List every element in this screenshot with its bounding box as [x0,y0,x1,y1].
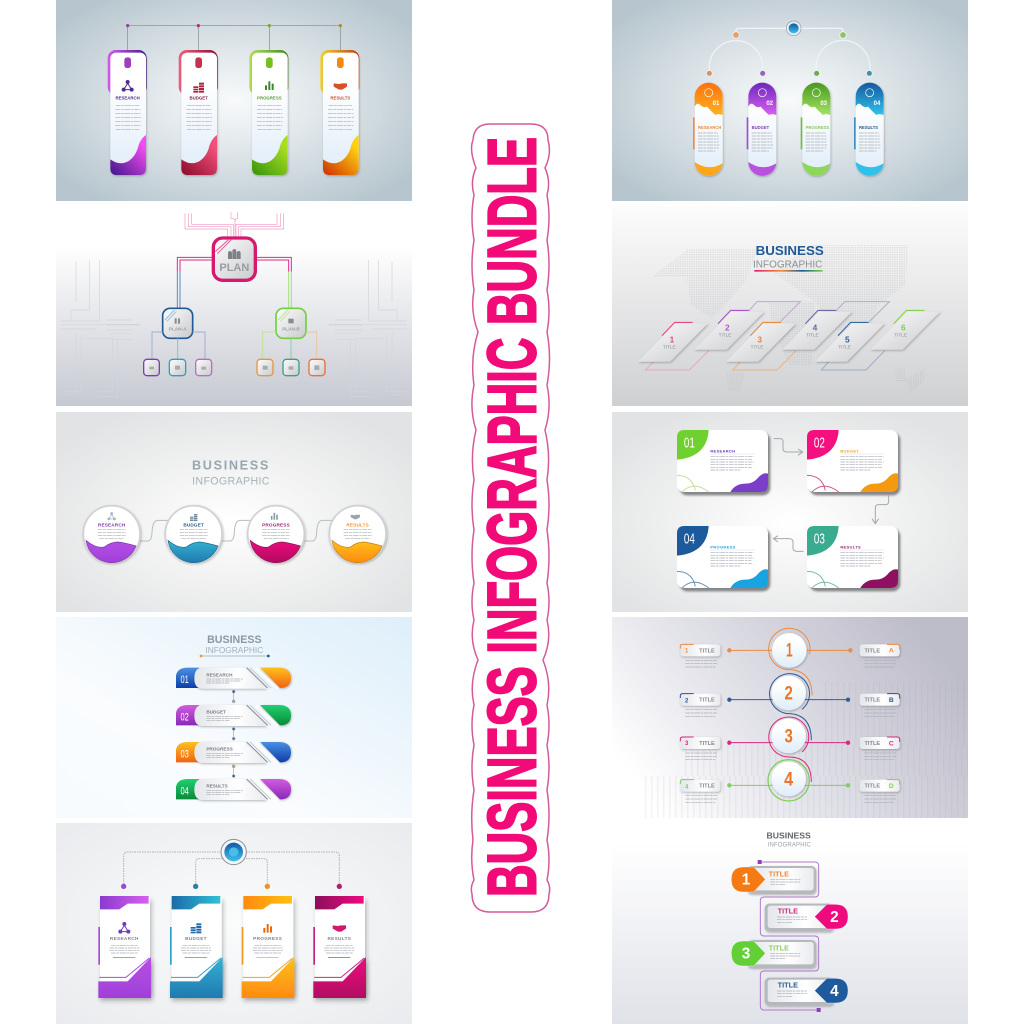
connectors to plan-A and plan-B [177,257,291,308]
circuit lines left [61,260,139,397]
row 03 progress: 03 [180,748,189,760]
tile 5: TITLE [838,345,851,350]
panel: circles with waves [56,412,412,612]
right item A: A [889,648,894,655]
capsule: budget: 02 [766,101,774,107]
card: results: RESULTS [330,95,350,100]
row 03 progress [176,742,291,763]
row 03 progress: PROGRESS [206,747,233,752]
left item 2: 2 [685,698,689,704]
left item 2 [680,694,720,716]
title: INFOGRAPHIC [192,475,270,487]
panel: stacked horizontal tabs [56,617,412,818]
panel background [56,617,412,818]
tile 2: 2 [725,322,730,332]
tile 4: 4 [813,322,818,332]
left item 4: 4 [685,784,689,790]
right item D: TITLE [864,784,880,790]
title: INFOGRAPHIC [768,842,812,848]
panel background [612,0,968,201]
arrow 02 to 03 [872,495,889,524]
row 01 research [176,668,291,689]
step 4: 4 [830,983,839,1000]
right item D [860,780,900,802]
sub boxes A [144,359,212,376]
card 02: 02 [814,436,825,452]
title [192,458,270,487]
capsule: results: RESULTS [859,125,878,130]
card: research [98,896,151,998]
step 2: 2 [830,909,839,926]
capsule: results: 04 [874,101,881,107]
capsule: research: RESEARCH [698,125,721,130]
purple wire [758,860,821,1012]
panel: numbered circle chain [612,617,968,818]
card 03: 03 [814,532,825,548]
left item 3 [680,737,720,760]
left item 1 [680,644,720,667]
panel: hub with four cards [56,823,412,1024]
step 4 [765,978,848,1006]
card: results [313,896,366,998]
tile 5: 5 [845,334,850,344]
capsule: research [693,83,723,176]
connectors [139,520,332,541]
row 01 research: 01 [180,674,189,686]
card: budget: BUDGET [185,936,207,941]
card: budget [170,896,223,998]
step 3 [731,940,816,968]
step 3: 3 [742,946,750,963]
tile 2: TITLE [719,333,731,338]
panel: zigzag arrow steps [612,823,968,1024]
card 04: 04 [684,532,695,548]
step 2 [765,904,848,932]
connector dots [706,32,872,76]
tile 3: TITLE [751,345,763,350]
card 01 [677,430,770,495]
dotted world map [652,245,925,393]
capsule: progress [801,83,830,176]
tile 1: TITLE [663,345,676,350]
title: BUSINESS [192,458,270,472]
box: plan: PLAN [219,262,249,274]
capsule: research: 01 [713,101,720,107]
circle 1: 1 [786,641,793,662]
left item 3: TITLE [699,741,715,747]
box: plan-B: PLAN-B [282,327,300,332]
left item 2: TITLE [699,698,715,704]
sub boxes B [257,359,325,376]
card: budget [179,50,218,175]
row 02 budget [176,705,291,726]
tile 3 [726,322,796,362]
panel background [56,206,412,406]
connectors to sub boxes [152,332,317,359]
right item A [860,644,900,667]
sub box icons [149,365,319,370]
panel background [612,617,968,818]
card: research: RESEARCH [116,95,140,100]
title: INFOGRAPHIC [753,259,822,270]
circle 4 [768,760,809,801]
panel background [612,412,968,612]
panel: plan tree [56,206,412,406]
step 2: TITLE [778,907,798,916]
left item 4 [680,780,720,802]
right item A: TITLE [864,648,880,654]
arrow 03 to 04 [773,536,804,551]
tile 3: 3 [757,334,762,344]
panel: four step cards with arrows [612,412,968,612]
faint vertical stripes [645,714,968,797]
card 01: RESEARCH [710,449,735,454]
step 4: TITLE [778,981,798,990]
right item C [860,737,900,760]
dotted connectors [124,852,339,884]
circle 2: 2 [784,683,793,704]
panel background [56,0,412,201]
row 04 results [176,779,291,800]
connector bar with dots [126,24,342,50]
panel: world map parallelograms [612,206,968,406]
circle: research: RESEARCH [98,522,126,527]
row 02 budget: BUDGET [206,710,226,715]
tile 6: TITLE [894,333,907,338]
box: plan-A [163,308,193,338]
title [767,831,812,848]
card: results [320,50,359,175]
right item C: C [889,740,894,747]
card: progress: PROGRESS [253,936,282,941]
title: BUSINESS [207,634,262,646]
card: research [108,50,147,175]
hub node [786,21,801,36]
card: budget: BUDGET [190,95,208,100]
hub node [221,839,246,865]
card 03 [807,526,900,591]
circle 2 [770,674,811,740]
tile 1: 1 [670,334,675,344]
step 1: 1 [742,872,751,889]
circle: budget [165,506,222,563]
circle 3: 3 [784,726,793,747]
wires above plan [185,212,284,237]
card 01: 01 [684,436,695,452]
panel background [612,206,968,406]
horizontal lines and dots [728,649,852,787]
capsule: budget [747,83,776,176]
circle: results [329,506,386,563]
circle: results: RESULTS [346,522,369,527]
title underline [200,655,270,657]
circle 4: 4 [784,769,794,790]
sticker outline behind main title [471,124,550,912]
right item B: B [889,697,894,704]
right item B [860,694,900,716]
row 04 results: RESULTS [206,784,228,789]
tile 4: TITLE [806,333,819,338]
tile 4 [782,310,852,350]
right item B: TITLE [864,698,880,704]
panel background [612,823,968,1024]
right item D: D [889,783,894,790]
card: progress [242,896,294,998]
left item 4: TITLE [699,784,715,790]
card: progress: PROGRESS [257,95,282,100]
capsule: progress: 03 [820,101,828,107]
card 04: PROGRESS [710,545,736,550]
tile 5 [815,322,885,362]
card 02 [807,430,900,495]
circle: research [83,506,140,563]
card 02: BUDGET [840,449,859,454]
circle: progress: PROGRESS [262,522,290,527]
right item C: TITLE [864,741,880,747]
capsule: budget: BUDGET [752,125,770,130]
card: progress [249,50,288,175]
left item 1: TITLE [699,648,715,654]
circle: budget: BUDGET [183,522,204,527]
card 03: RESULTS [840,545,861,550]
capsule: results [854,83,884,176]
row 01 research: RESEARCH [206,672,233,677]
box: plan [213,238,255,280]
step 1 [731,866,816,894]
title underline [754,270,823,272]
left item 3: 3 [685,741,689,747]
card: research: RESEARCH [110,936,139,941]
step 1: TITLE [769,869,789,878]
box: plan-A: PLAN-A [169,327,187,332]
tile 6: 6 [901,322,906,332]
capsule: progress: PROGRESS [806,125,829,130]
title: BUSINESS [756,243,824,258]
row 02 budget: 02 [180,711,189,723]
connector arcs [709,28,870,70]
row 04 results: 04 [180,785,189,797]
panel background [56,412,412,612]
card: results: RESULTS [327,936,351,941]
circle: progress [248,506,304,563]
circuit lines right [329,260,407,397]
card 04 [677,526,770,591]
title [205,634,263,655]
connector end dots [121,884,342,889]
box: plan-B [276,308,306,338]
tile 1 [638,322,708,362]
title [753,243,824,270]
panel: vertical tag cards [56,0,412,201]
left item 1: 1 [685,648,689,654]
row connectors [232,690,235,778]
panel: capsule tree [612,0,968,201]
arrow 01 to 02 [774,439,803,455]
title: INFOGRAPHIC [205,645,263,655]
circle 3 [769,717,811,782]
step 3: TITLE [769,943,789,952]
tile 6 [870,310,940,350]
panel background [56,823,412,1024]
title: BUSINESS [767,831,811,841]
circle 1 [769,628,812,695]
back frames [645,302,889,370]
tile 2 [694,310,764,350]
